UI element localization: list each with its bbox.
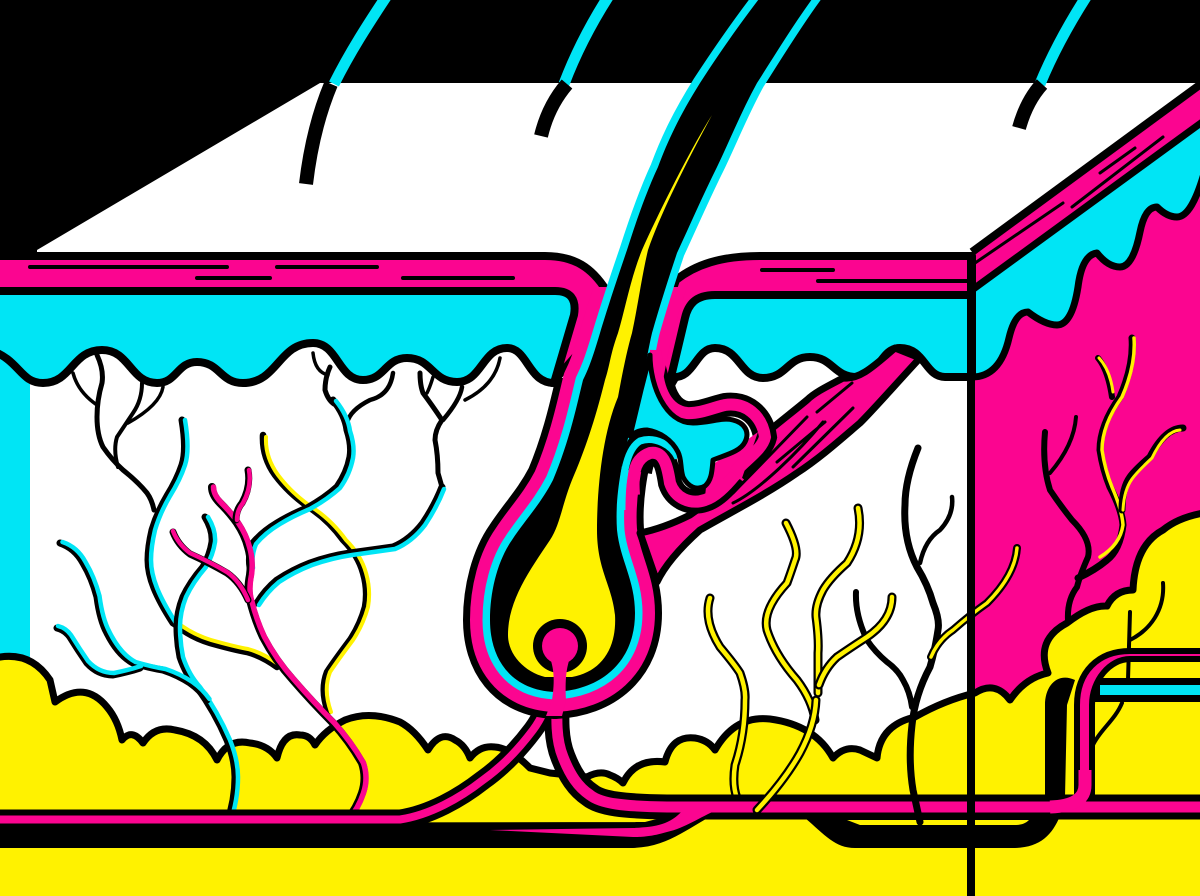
panel: left nerve tree <box>57 353 500 823</box>
black hair shaft <box>490 0 815 692</box>
dark background <box>0 0 1200 262</box>
tapered vessel tail <box>490 810 717 837</box>
left cyan epidermis with wavy edge <box>0 291 575 383</box>
panel: top epidermis layer left <box>0 256 606 383</box>
small hair strands <box>306 0 1088 184</box>
black vertical vessel <box>1045 678 1075 797</box>
central hair follicle <box>490 0 815 692</box>
black dermal roots left <box>73 355 163 510</box>
panel: right side face <box>972 81 1200 896</box>
yellow sliver <box>847 820 1029 825</box>
magenta sheath <box>470 287 678 712</box>
panel: bottom vessels <box>0 583 1200 848</box>
black dermal roots centre <box>313 353 500 487</box>
gland walls outline <box>622 350 765 510</box>
yellow hair core and bulb <box>508 115 712 677</box>
cyan nerves <box>57 400 444 823</box>
outer follicle outline <box>463 378 662 719</box>
cyan sheath <box>490 0 815 692</box>
muscle fibre lines <box>733 383 853 503</box>
lower black band right <box>805 816 1060 848</box>
curved vessel <box>1077 651 1200 796</box>
muscle <box>640 348 920 582</box>
panel: top epidermis layer right <box>655 256 972 390</box>
papilla and root stem <box>533 619 587 716</box>
right thin branches <box>1093 583 1163 745</box>
left cyan edge strip <box>0 345 30 665</box>
nerves overlapping vessels <box>757 448 1017 822</box>
yellow nerve loop <box>173 435 369 712</box>
magenta nerve <box>173 470 366 820</box>
panel: right-centre nerve branches <box>708 497 952 798</box>
panel: right face nerves <box>1044 338 1183 680</box>
cyan bar <box>1095 678 1200 702</box>
lower black band left <box>0 812 720 848</box>
gland cyan lobes <box>630 355 747 488</box>
magenta band right <box>655 256 972 390</box>
panel: yellow fat layer <box>0 512 1200 896</box>
right cyan epidermis with wavy edge <box>671 295 972 378</box>
stem and horizontal vessels <box>0 690 1200 820</box>
sebaceous gland and arrector muscle <box>622 348 920 582</box>
vertical edge line of skin block <box>967 252 975 896</box>
magenta band left <box>0 256 606 383</box>
